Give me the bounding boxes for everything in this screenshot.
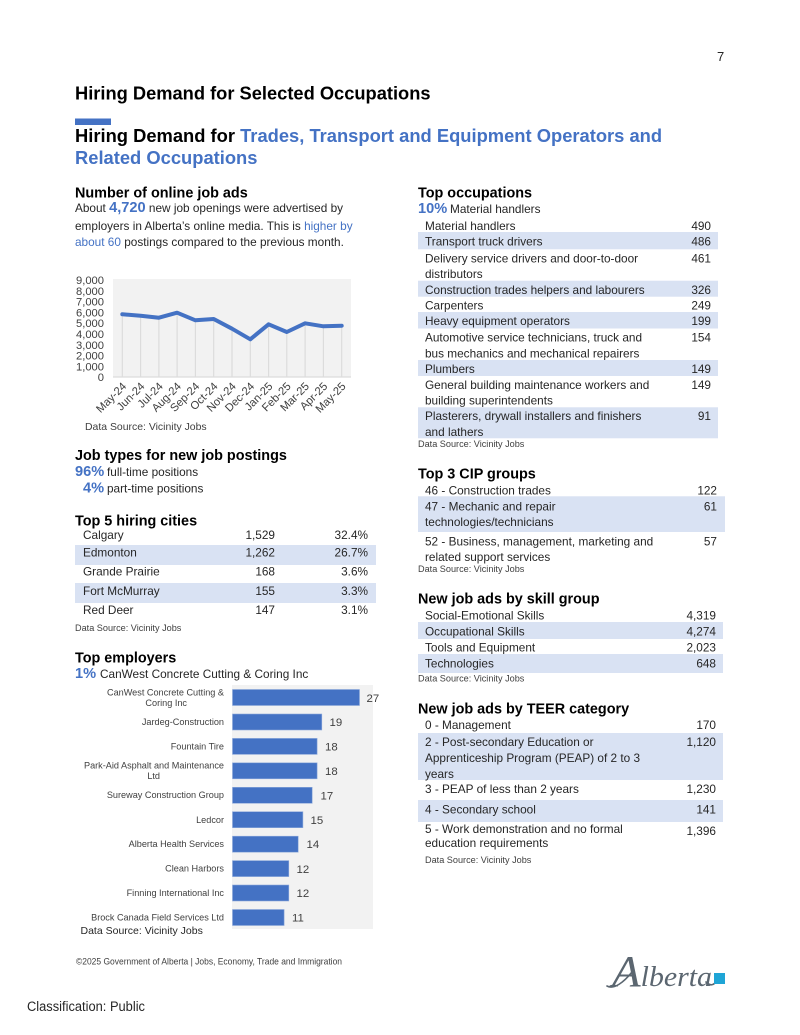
line chart: monthly job ads: Sep-24 bbox=[168, 381, 202, 415]
table: skill groups: Occupational Skills bbox=[425, 624, 525, 638]
table: top occupations: 486 bbox=[691, 234, 711, 248]
bar chart: top employers: Alberta Health Services bbox=[129, 839, 224, 849]
table: top occupations: Delivery service drivers and door-to-door bbox=[425, 252, 638, 266]
table: top occupations: 490 bbox=[691, 219, 711, 233]
stat: top employer share: 1% bbox=[75, 666, 96, 682]
table: hiring cities: Grande Prairie bbox=[83, 564, 160, 578]
text block: job ads summary: About 4,720 new job openings were advertised by bbox=[75, 200, 343, 216]
bar chart: top employers: Jardeg-Construction bbox=[142, 717, 224, 727]
bar chart: top employers bbox=[84, 685, 379, 929]
line chart: monthly job ads: Mar-25 bbox=[278, 381, 312, 414]
panel: top 5 hiring cities bbox=[75, 514, 376, 633]
table: TEER categories: 1,120 bbox=[686, 735, 716, 749]
table: top occupations: 249 bbox=[691, 298, 711, 312]
table: top occupations: bus mechanics and mechanical repairers bbox=[425, 346, 640, 360]
bar chart: top employers: Ltd bbox=[147, 771, 160, 781]
table: top occupations: Automotive service technicians, truck and bbox=[425, 330, 642, 344]
bar chart: top employers: Ledcor bbox=[196, 815, 224, 825]
stat: full-time: 96% bbox=[75, 464, 104, 480]
table: skill groups: Social-Emotional Skills bbox=[425, 608, 544, 622]
table: top occupations: Plasterers, drywall installers and finishers bbox=[425, 409, 641, 423]
line chart: monthly job ads: 3,000 bbox=[76, 340, 104, 352]
table: top occupations: 326 bbox=[691, 283, 711, 297]
table: CIP groups: 47 - Mechanic and repair bbox=[425, 500, 556, 514]
bar chart: top employers: 19 bbox=[330, 717, 342, 729]
bar chart: top employers: Brock Canada Field Services Ltd bbox=[91, 912, 224, 922]
table: top occupations: Plumbers bbox=[425, 362, 475, 376]
table: TEER categories: Apprenticeship Program (PEAP) of 2 to 3 bbox=[425, 751, 641, 765]
table: hiring cities bbox=[75, 528, 376, 617]
bar chart: top employers: CanWest Concrete Cutting & bbox=[107, 688, 224, 698]
table: top occupations: 91 bbox=[698, 409, 711, 423]
table: CIP groups: 52 - Business, management, marketing and bbox=[425, 534, 653, 548]
data source: line chart: Data Source: Vicinity Jobs bbox=[85, 422, 207, 433]
heading: CIP groups: Top 3 CIP groups bbox=[418, 467, 536, 483]
panel: new job ads by skill group bbox=[418, 592, 723, 684]
line chart: monthly job ads: Nov-24 bbox=[205, 381, 239, 415]
table: top occupations: Material handlers bbox=[425, 219, 516, 233]
stat: full-time: full-time positions bbox=[107, 465, 198, 479]
data source: cities: Data Source: Vicinity Jobs bbox=[75, 623, 182, 633]
table: top occupations bbox=[418, 219, 718, 439]
table: top occupations: 149 bbox=[691, 362, 711, 376]
table: skill groups: 4,319 bbox=[686, 608, 716, 622]
table: skill groups: Tools and Equipment bbox=[425, 640, 536, 654]
data source: employers: Data Source: Vicinity Jobs bbox=[80, 925, 203, 937]
heading: top employers: Top employers bbox=[75, 651, 176, 667]
bar chart: top employers: 15 bbox=[310, 815, 323, 827]
table: top occupations: Heavy equipment operators bbox=[425, 314, 570, 328]
table: top occupations: distributors bbox=[425, 267, 483, 281]
table: top occupations: 154 bbox=[691, 330, 711, 344]
table: hiring cities: Fort McMurray bbox=[83, 584, 160, 598]
stat: top employer share: CanWest Concrete Cutting & Coring Inc bbox=[100, 667, 308, 681]
title: Hiring Demand for Selected Occupations bbox=[75, 82, 431, 104]
line chart: monthly job ads: Feb-25 bbox=[260, 381, 294, 414]
table: TEER categories: 141 bbox=[696, 802, 716, 816]
table: hiring cities: 1,262 bbox=[245, 546, 275, 560]
table: top occupations: Carpenters bbox=[425, 298, 483, 312]
table: TEER categories: 5 - Work demonstration and no formal bbox=[425, 822, 623, 836]
bar chart: top employers: 18 bbox=[325, 766, 338, 778]
table: TEER categories: 1,396 bbox=[686, 824, 716, 838]
text block: job ads summary bbox=[75, 200, 353, 249]
table: CIP groups bbox=[418, 484, 725, 564]
line chart: monthly job ads: 2,000 bbox=[76, 351, 104, 363]
table: TEER categories: 0 - Management bbox=[425, 718, 512, 732]
table: hiring cities: 3.3% bbox=[341, 584, 369, 598]
line chart: monthly job ads: 1,000 bbox=[76, 361, 104, 373]
data source: TEER: Data Source: Vicinity Jobs bbox=[425, 855, 532, 865]
table: hiring cities: 32.4% bbox=[335, 528, 369, 542]
line chart: monthly job ads: Apr-25 bbox=[298, 381, 330, 413]
line chart: monthly job ads: 6,000 bbox=[76, 307, 104, 319]
bar chart: top employers: 27 bbox=[366, 693, 379, 705]
bar chart: top employers: 12 bbox=[296, 864, 309, 876]
table: top occupations: Transport truck drivers bbox=[425, 234, 543, 248]
table: CIP groups: related support services bbox=[425, 550, 550, 564]
table: TEER categories: 1,230 bbox=[686, 782, 716, 796]
bar chart: top employers: Fountain Tire bbox=[171, 742, 224, 752]
table: top occupations: building superintendents bbox=[425, 394, 553, 408]
line chart: monthly job ads: May-25 bbox=[314, 381, 349, 416]
heading: TEER category: New job ads by TEER category bbox=[418, 702, 629, 718]
icon: Alberta logo: Alberta bbox=[609, 947, 712, 996]
table: hiring cities: 155 bbox=[255, 584, 275, 598]
line chart: monthly job ads: Jul-24 bbox=[136, 381, 166, 411]
line chart: monthly job ads: Dec-24 bbox=[223, 381, 257, 415]
table: TEER categories: 2 - Post-secondary Education or bbox=[425, 735, 594, 749]
panel: number of online job ads bbox=[75, 186, 353, 249]
table: skill groups: 648 bbox=[696, 656, 716, 670]
heading: skill group: New job ads by skill group bbox=[418, 592, 600, 608]
line chart: monthly job ads: 5,000 bbox=[76, 318, 104, 330]
panel: job types bbox=[75, 448, 287, 496]
section heading bbox=[75, 125, 662, 168]
stat: top occupation share: Material handlers bbox=[450, 202, 541, 216]
data source: CIP: Data Source: Vicinity Jobs bbox=[418, 564, 525, 574]
line chart: monthly job ads: May-24 bbox=[94, 381, 129, 416]
table: TEER categories: years bbox=[425, 767, 454, 781]
table: skill groups: Technologies bbox=[425, 656, 494, 670]
table: hiring cities: 26.7% bbox=[335, 546, 369, 560]
bar chart: top employers: 17 bbox=[320, 790, 333, 802]
bar chart: top employers: 12 bbox=[296, 888, 309, 900]
table: TEER categories: 4 - Secondary school bbox=[425, 802, 536, 816]
table: hiring cities: 3.6% bbox=[341, 564, 369, 578]
bar chart: top employers: 18 bbox=[325, 742, 338, 754]
line chart: monthly job ads: 8,000 bbox=[76, 286, 104, 298]
table: top occupations: General building maintenance workers and bbox=[425, 378, 649, 392]
table: skill groups: 2,023 bbox=[686, 640, 716, 654]
data source: skills: Data Source: Vicinity Jobs bbox=[418, 674, 525, 684]
stat: part-time: 4% bbox=[83, 480, 104, 496]
line chart: monthly job ads: 0 bbox=[98, 372, 104, 384]
bar chart: top employers: Clean Harbors bbox=[165, 864, 224, 874]
panel: top occupations bbox=[418, 186, 718, 449]
table: hiring cities: 1,529 bbox=[245, 528, 275, 542]
table: TEER categories bbox=[418, 718, 723, 850]
page number: 7 bbox=[717, 49, 724, 64]
section heading: Related Occupations bbox=[75, 147, 257, 168]
heading: top occupations: Top occupations bbox=[418, 186, 532, 202]
table: hiring cities: Red Deer bbox=[83, 603, 134, 617]
section heading: Hiring Demand for Trades, Transport and Equipment Operators and bbox=[75, 125, 662, 146]
line chart: monthly job ads: 9,000 bbox=[76, 275, 104, 287]
text block: job ads summary: about 60 postings compared to the previous month. bbox=[75, 235, 344, 249]
bar chart: top employers: Park-Aid Asphalt and Maintenance bbox=[84, 760, 224, 770]
bar chart: top employers: Sureway Construction Group bbox=[107, 790, 224, 800]
table: top occupations: 149 bbox=[691, 378, 711, 392]
table: top occupations: 199 bbox=[691, 314, 711, 328]
heading: job types: Job types for new job postings bbox=[75, 448, 287, 464]
bar chart: top employers: 11 bbox=[292, 912, 304, 924]
stat: part-time: part-time positions bbox=[107, 482, 203, 496]
table: CIP groups: 57 bbox=[704, 534, 717, 548]
table: top occupations: 461 bbox=[691, 252, 711, 266]
panel: new job ads by TEER category bbox=[418, 702, 723, 865]
table: TEER categories: 3 - PEAP of less than 2 years bbox=[425, 782, 579, 796]
data source: occupations: Data Source: Vicinity Jobs bbox=[418, 439, 525, 449]
table: CIP groups: 61 bbox=[704, 500, 717, 514]
table: top occupations: Construction trades helpers and labourers bbox=[425, 283, 645, 297]
table: CIP groups: technologies/technicians bbox=[425, 515, 554, 529]
classification label: Classification: Public bbox=[27, 999, 145, 1014]
accent bar bbox=[75, 118, 111, 125]
heading: top 5 hiring cities: Top 5 hiring cities bbox=[75, 514, 197, 530]
line chart: monthly job ads: 7,000 bbox=[76, 297, 104, 309]
panel: top 3 CIP groups bbox=[418, 467, 725, 574]
table: hiring cities: Calgary bbox=[83, 528, 124, 542]
footer copyright: ©2025 Government of Alberta | Jobs, Economy, Trade and Immigration bbox=[76, 956, 342, 966]
table: CIP groups: 46 - Construction trades bbox=[425, 484, 551, 498]
table: hiring cities: 147 bbox=[255, 603, 275, 617]
table: CIP groups: 122 bbox=[697, 484, 717, 498]
stat: top occupation share: 10% bbox=[418, 201, 447, 217]
text block: job ads summary: employers in Alberta’s online media. This is higher by bbox=[75, 219, 353, 233]
table: hiring cities: 168 bbox=[255, 564, 275, 578]
table: TEER categories: education requirements bbox=[425, 836, 548, 850]
line chart: monthly job ads: Oct-24 bbox=[188, 381, 221, 413]
heading: number of online job ads: Number of online job ads bbox=[75, 186, 248, 202]
bar chart: top employers: Finning International Inc bbox=[127, 888, 224, 898]
bar chart: top employers: 14 bbox=[306, 839, 319, 851]
table: hiring cities: 3.1% bbox=[341, 603, 369, 617]
table: hiring cities: Edmonton bbox=[83, 546, 137, 560]
line chart: monthly job ads: Jun-24 bbox=[115, 381, 147, 413]
table: skill groups bbox=[418, 608, 723, 673]
table: skill groups: 4,274 bbox=[686, 624, 716, 638]
table: TEER categories: 170 bbox=[696, 718, 716, 732]
line chart: monthly job ads: Aug-24 bbox=[150, 381, 184, 415]
panel: top employers bbox=[75, 651, 379, 937]
bar chart: top employers: Coring Inc bbox=[145, 698, 187, 708]
line chart: monthly job ads: 4,000 bbox=[76, 329, 104, 341]
line chart: monthly job ads: Jan-25 bbox=[243, 381, 275, 413]
line chart: monthly job ads bbox=[76, 275, 351, 416]
table: top occupations: and lathers bbox=[425, 425, 483, 439]
